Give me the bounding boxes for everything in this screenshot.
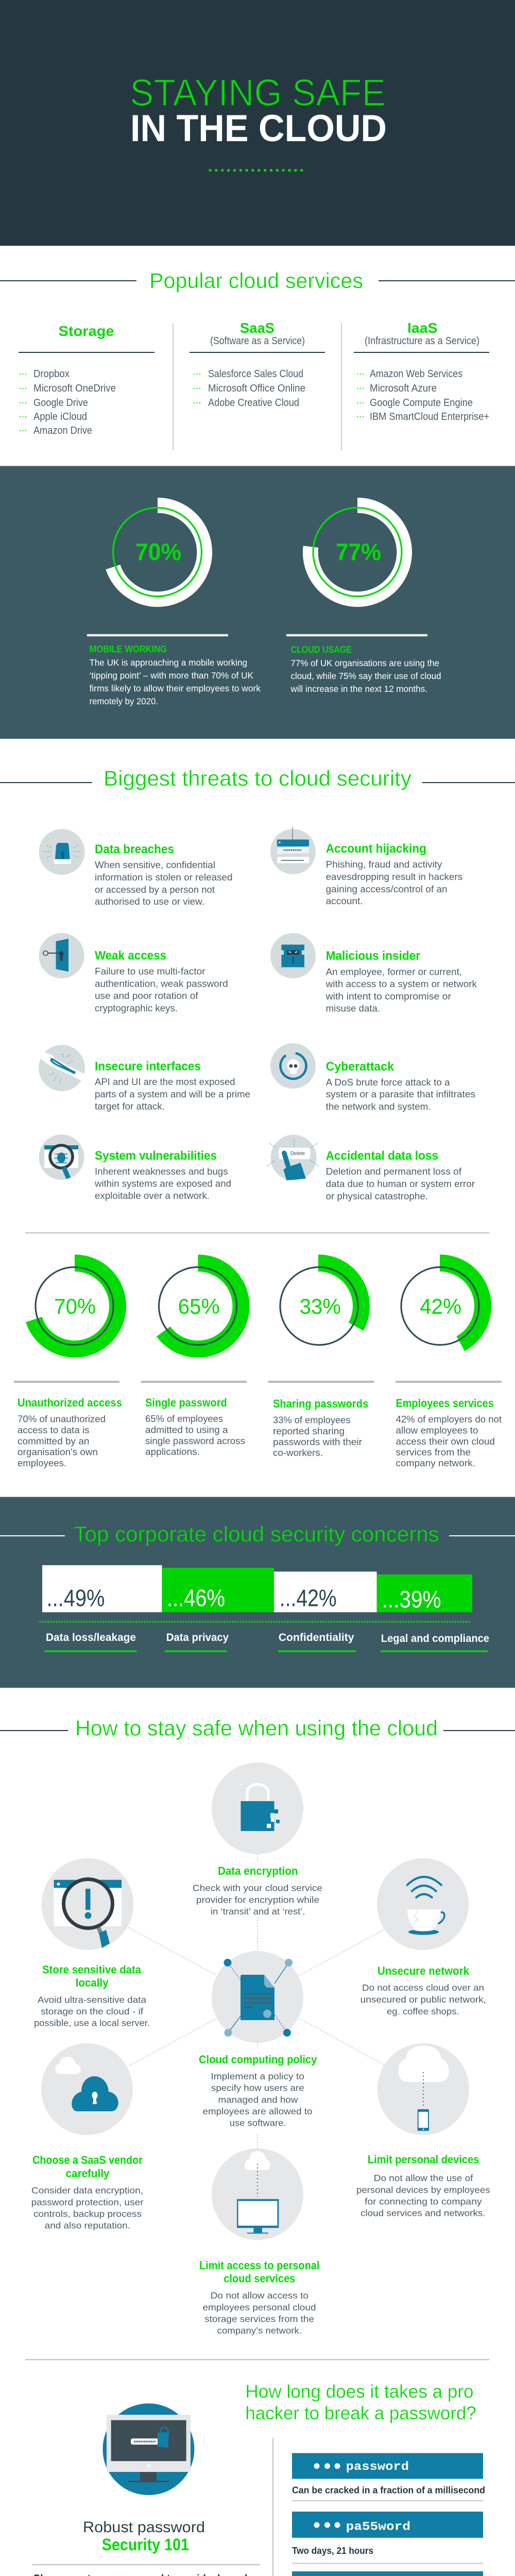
text block: single password: applications. xyxy=(145,1446,200,1457)
panel: data encryption: provider for encryption while xyxy=(196,1894,319,1905)
text block: mobile working: remotely by 2020. xyxy=(90,696,158,706)
title line: in the cloud: IN THE CLOUD xyxy=(130,108,387,149)
bar labels xyxy=(45,1632,489,1651)
text block: mobile working: firms likely to allow their employees to work xyxy=(90,683,261,693)
panel: threat cyberattack xyxy=(270,1043,475,1112)
panel: unsecure network: Do not access cloud over an xyxy=(362,1982,484,1993)
text block: unauthorized access: Unauthorized access xyxy=(18,1396,122,1409)
column: storage xyxy=(20,323,116,436)
text block: sharing passwords: co-workers. xyxy=(273,1447,323,1458)
panel: security 101 xyxy=(32,2519,260,2576)
panel: threat data breaches: Data breaches xyxy=(95,842,174,856)
panel: choose a saas vendor xyxy=(31,2043,144,2231)
ring: unauthorized 70 percent xyxy=(32,1263,117,1349)
text block: employees services: services from the xyxy=(396,1447,471,1458)
panel: threat malicious insider: Malicious insider xyxy=(326,949,420,963)
text block: unauthorized access: employees. xyxy=(18,1458,66,1468)
panel: service columns xyxy=(19,320,489,450)
text block: cloud usage: will increase in the next 12 months. xyxy=(290,684,427,694)
column: iaas: Amazon Web Services xyxy=(370,368,462,380)
panel: choose a saas vendor: Choose a SaaS vendor xyxy=(32,2154,143,2166)
text block: mobile working: ‘tipping point’ – with more than 70% of UK xyxy=(90,670,253,681)
panel: threat data breaches: or accessed by a person not xyxy=(95,884,215,895)
panel: limit access to personal cloud services: Limit access to personal xyxy=(199,2259,319,2272)
text block: single password xyxy=(145,1396,245,1457)
panel: unsecure network: unsecured or public network, xyxy=(360,1994,486,2005)
text block: cloud usage: cloud, while 75% say their use of cloud xyxy=(290,671,441,681)
text block: employees services: access their own cloud xyxy=(396,1436,495,1447)
panel: mobile working and cloud usage xyxy=(0,466,515,739)
text block: employees services: 42% of employers do not xyxy=(396,1414,502,1425)
panel: threat malicious insider: with access to a system or network xyxy=(325,978,477,989)
ring chart: 70 percent: 70% xyxy=(135,538,181,565)
icon: cloud and phone xyxy=(377,2043,469,2135)
panel: limit personal devices xyxy=(356,2043,490,2218)
icon: delete key and finger xyxy=(267,1134,318,1181)
password row: pa55word xyxy=(292,2512,483,2556)
column: iaas: Microsoft Azure xyxy=(370,383,437,394)
heading: how to stay safe: How to stay safe when using the cloud xyxy=(75,1716,438,1740)
panel: threat weak access: authentication, weak password xyxy=(95,978,228,989)
panel: store sensitive data locally: Avoid ultra-sensitive data xyxy=(38,1995,146,2005)
column: iaas xyxy=(357,320,489,422)
password row: passworD xyxy=(292,2571,483,2576)
text block: employees services: allow employees to xyxy=(396,1425,478,1436)
panel: unsecure network: eg. coffee shops. xyxy=(387,2006,459,2016)
panel: store sensitive data locally: possible, use a local server. xyxy=(34,2018,150,2028)
panel: limit access to personal cloud services xyxy=(199,2148,319,2336)
ring: sharing passwords 33 percent: 33% xyxy=(300,1294,341,1318)
column: saas: Microsoft Office Online xyxy=(208,383,305,394)
panel: threat accidental data loss: Deletion and permanent loss of xyxy=(326,1166,462,1177)
panel: threat accidental data loss: Accidental data loss xyxy=(326,1149,438,1163)
panel: threat accidental data loss: data due to human or system error xyxy=(326,1178,475,1189)
panel: threat account hijacking: gaining access/control of an xyxy=(326,884,448,894)
ring chart: 77 percent: 77% xyxy=(336,538,381,565)
text block: sharing passwords: reported sharing xyxy=(273,1426,345,1436)
panel: threat accidental data loss xyxy=(267,1134,475,1201)
icon: magnifier with warning xyxy=(42,1858,133,1950)
panel: limit personal devices: Limit personal devices xyxy=(368,2153,479,2166)
panel: unsecure network: Unsecure network xyxy=(377,1964,470,1977)
panel: threat cyberattack: the network and system. xyxy=(326,1101,431,1112)
panel: threat cyberattack: A DoS brute force attack to a xyxy=(326,1077,450,1088)
panel: unsecure network xyxy=(360,1858,486,2016)
panel: threat account hijacking: Phishing, fraud and activity xyxy=(326,859,442,870)
panel: threat malicious insider: misuse data. xyxy=(326,1003,380,1013)
panel: threat weak access xyxy=(39,933,228,1013)
text block: unauthorized access: 70% of unauthorized xyxy=(18,1414,106,1425)
column: iaas: IBM SmartCloud Enterprise+ xyxy=(370,411,489,422)
panel: security 101: Robust password xyxy=(83,2519,205,2536)
column: iaas: IaaS xyxy=(407,320,438,336)
heading: top corporate cloud security concerns: Top corporate cloud security concerns xyxy=(74,1522,439,1546)
column: storage: Dropbox xyxy=(33,368,70,380)
icon: monitor with password xyxy=(102,2403,194,2495)
panel: threat account hijacking: Account hijacking xyxy=(326,842,426,856)
panel: threat system vulnerabilities: Inherent weaknesses and bugs xyxy=(95,1166,228,1177)
heading: popular cloud services: Popular cloud services xyxy=(149,268,363,293)
text block: sharing passwords xyxy=(273,1397,368,1458)
panel: threat account hijacking: account. xyxy=(326,895,363,906)
ring: single password 65 percent: 65% xyxy=(178,1294,220,1318)
heading: biggest threats: Biggest threats to cloud security xyxy=(104,766,411,790)
panel: password cracking times xyxy=(292,2453,485,2576)
panel: threat data breaches xyxy=(39,829,233,907)
icon: skull xyxy=(270,1043,316,1089)
ring: employees services 42 percent xyxy=(397,1263,483,1349)
dotted divider xyxy=(210,169,303,172)
panel: threat weak access: cryptographic keys. xyxy=(95,1003,178,1013)
panel: threat weak access: use and poor rotation of xyxy=(95,990,198,1001)
panel: store sensitive data locally: Store sensitive data xyxy=(42,1963,142,1976)
panel: choose a saas vendor: password protection, user xyxy=(31,2197,144,2207)
panel: cloud computing policy: specify how users are xyxy=(211,2083,304,2093)
password row: password xyxy=(292,2453,485,2496)
panel: threat cyberattack: Cyberattack xyxy=(326,1060,394,1074)
panel: threat account hijacking xyxy=(270,827,462,906)
text block: single password: single password across xyxy=(145,1435,245,1446)
panel: threat malicious insider: An employee, former or current, xyxy=(326,966,462,977)
text block: sharing passwords: Sharing passwords xyxy=(273,1397,368,1410)
heading: how long to break a password xyxy=(245,2381,476,2424)
panel: limit personal devices: personal devices by employees xyxy=(356,2184,490,2195)
panel: hero header xyxy=(0,0,515,246)
panel: threat malicious insider: with intent to compromise or xyxy=(325,991,451,1002)
text block: unauthorized access: committed by an xyxy=(18,1436,90,1447)
panel: security 101: Security 101 xyxy=(102,2535,189,2554)
icon: document hub xyxy=(212,1951,303,2043)
panel: threat insecure interfaces xyxy=(38,1045,250,1112)
panel: threat data breaches: information is stolen or released xyxy=(95,872,233,883)
bar chart: concerns: ...42% xyxy=(280,1585,337,1612)
panel: threat malicious insider xyxy=(270,933,477,1013)
password row: pa55word: pa55word xyxy=(346,2520,410,2534)
column: saas xyxy=(194,320,305,409)
column: storage: Google Drive xyxy=(33,397,88,409)
ring: single password 65 percent xyxy=(155,1263,241,1349)
ring: unauthorized 70 percent: 70% xyxy=(54,1294,96,1318)
icon: broken chain xyxy=(38,1045,87,1091)
text block: unauthorized access xyxy=(18,1396,122,1468)
column: saas: Adobe Creative Cloud xyxy=(208,397,299,409)
panel: threat insecure interfaces: parts of a system and will be a prime xyxy=(95,1089,250,1099)
panel: store sensitive data locally: locally xyxy=(76,1976,109,1989)
panel: threat insecure interfaces: API and UI are the most exposed xyxy=(95,1076,235,1087)
column: storage: Apple iCloud xyxy=(33,411,87,422)
column: saas: SaaS xyxy=(240,320,274,336)
icon: phishing hook and login xyxy=(270,827,316,874)
ring: employees services 42 percent: 42% xyxy=(420,1294,461,1318)
panel: limit access to personal cloud services: Do not allow access to xyxy=(211,2291,308,2301)
panel: data encryption: Data encryption xyxy=(218,1865,298,1877)
panel: choose a saas vendor: and also reputation. xyxy=(45,2221,130,2231)
heading: how long to break a password: hacker to break a password? xyxy=(245,2402,476,2424)
text block: mobile working xyxy=(90,644,261,706)
bar chart: concerns xyxy=(42,1565,472,1613)
icon: door and key xyxy=(39,933,84,978)
icon: bug under magnifier xyxy=(39,1134,84,1180)
bar labels: Confidentiality xyxy=(279,1632,354,1643)
icon: cloud and monitor xyxy=(212,2148,303,2240)
panel: choose a saas vendor: carefully xyxy=(66,2167,110,2180)
text block: employees services xyxy=(396,1397,502,1468)
panel: data encryption: in ‘transit’ and at ‘rest’. xyxy=(211,1906,305,1917)
text block: single password: 65% of employees xyxy=(145,1413,223,1424)
text block: single password: admitted to using a xyxy=(145,1425,228,1435)
title line: staying safe: STAYING SAFE xyxy=(130,72,386,114)
icon: padlock xyxy=(212,1762,303,1854)
panel: threat system vulnerabilities xyxy=(39,1134,231,1201)
panel: threat cyberattack: system or a parasite that infiltrates xyxy=(326,1089,475,1099)
bar labels: Legal and compliance xyxy=(381,1633,489,1645)
column: storage: Amazon Drive xyxy=(33,425,92,436)
panel: data encryption xyxy=(193,1762,322,1917)
panel: threat data breaches: When sensitive, confidential xyxy=(95,859,215,870)
text block: cloud usage: CLOUD USAGE xyxy=(290,645,352,655)
heading: how long to break a password: How long does it takes a pro xyxy=(245,2381,474,2402)
icon: siren xyxy=(39,829,84,875)
icon: wifi and broken cup xyxy=(377,1858,469,1950)
panel: threat insecure interfaces: Insecure interfaces xyxy=(95,1060,201,1074)
panel: store sensitive data locally xyxy=(34,1858,150,2028)
panel: threat accidental data loss: or physical catastrophe. xyxy=(326,1191,428,1201)
icon: locked cloud xyxy=(41,2043,133,2135)
panel: limit access to personal cloud services: cloud services xyxy=(224,2272,295,2285)
panel: threat system vulnerabilities: System vulnerabilities xyxy=(95,1149,217,1163)
panel: choose a saas vendor: controls, backup process xyxy=(33,2209,142,2219)
panel: limit personal devices: cloud services and networks. xyxy=(360,2208,486,2218)
text block: unauthorized access: organisation's own xyxy=(18,1447,98,1458)
text block: cloud usage xyxy=(290,645,441,694)
text block: sharing passwords: 33% of employees xyxy=(273,1415,350,1425)
panel: limit access to personal cloud services: company’s network. xyxy=(217,2326,302,2336)
text block: unauthorized access: access to data is xyxy=(18,1425,89,1435)
panel: cloud computing policy: Implement a policy to xyxy=(211,2071,304,2081)
bar labels: Data privacy xyxy=(166,1632,229,1643)
text block: sharing passwords: passwords with their xyxy=(273,1436,362,1447)
ring: sharing passwords 33 percent xyxy=(275,1263,362,1349)
column: storage: Microsoft OneDrive xyxy=(33,383,116,394)
panel: limit personal devices: Do not allow the use of xyxy=(374,2173,473,2183)
text block: employees services: company network. xyxy=(396,1458,475,1468)
password row: password: password xyxy=(346,2460,409,2473)
panel: cloud computing policy xyxy=(199,1951,317,2128)
ring chart group: employee statistics xyxy=(14,1263,502,1382)
bar chart: concerns: ...49% xyxy=(46,1585,105,1612)
bar chart: concerns: ...46% xyxy=(167,1585,225,1612)
panel: threat weak access: Weak access xyxy=(95,949,166,962)
column: saas: (Software as a Service) xyxy=(210,335,305,347)
panel: store sensitive data locally: storage on the cloud - if xyxy=(41,2006,143,2016)
bar chart: concerns: ...39% xyxy=(382,1586,441,1613)
panel: cloud computing policy: managed and how xyxy=(218,2095,298,2105)
icon: masked figure xyxy=(270,933,316,978)
text block: employees services: Employees services xyxy=(396,1397,493,1410)
panel: threat account hijacking: eavesdropping result in hackers xyxy=(326,871,462,882)
panel: threat system vulnerabilities: within systems are exposed and xyxy=(94,1178,231,1189)
text block: mobile working: The UK is approaching a mobile working xyxy=(90,657,247,668)
text block: mobile working: MOBILE WORKING xyxy=(90,644,167,654)
column: iaas: (Infrastructure as a Service) xyxy=(365,335,479,347)
password row: pa55word: Two days, 21 hours xyxy=(292,2545,373,2556)
panel: cloud computing policy: employees are allowed to xyxy=(203,2106,312,2116)
ring chart: 70 percent xyxy=(111,505,204,599)
panel: cloud computing policy: Cloud computing policy xyxy=(199,2053,317,2066)
panel: top corporate concerns xyxy=(0,1497,515,1688)
ring chart: 77 percent xyxy=(311,505,404,599)
column: iaas: Google Compute Engine xyxy=(370,397,473,409)
text block: cloud usage: 77% of UK organisations are using the xyxy=(290,658,439,668)
text block: single password: Single password xyxy=(145,1396,227,1409)
column: saas: Salesforce Sales Cloud xyxy=(208,368,303,380)
icon: delete key and finger: Delete xyxy=(290,1150,305,1157)
column: storage: Storage xyxy=(59,323,114,339)
bar labels: Data loss/leakage xyxy=(46,1632,136,1643)
panel: threat weak access: Failure to use multi-factor xyxy=(95,965,205,977)
panel: threat data breaches: authorised to use or view. xyxy=(95,896,204,907)
panel: threat system vulnerabilities: exploitable over a network. xyxy=(95,1190,210,1201)
panel: threat insecure interfaces: target for attack. xyxy=(95,1101,165,1112)
password row: password: Can be cracked in a fraction of a millisecond xyxy=(292,2485,485,2496)
panel: data encryption: Check with your cloud service xyxy=(193,1883,322,1893)
panel: limit personal devices: for connecting to company xyxy=(365,2196,482,2207)
panel: choose a saas vendor: Consider data encryption, xyxy=(31,2185,143,2196)
panel: cloud computing policy: use software. xyxy=(230,2118,286,2128)
panel: limit access to personal cloud services: employees personal cloud xyxy=(203,2302,316,2312)
panel: limit access to personal cloud services: storage services from the xyxy=(204,2314,314,2324)
diagram: connector lines xyxy=(128,1854,384,2148)
